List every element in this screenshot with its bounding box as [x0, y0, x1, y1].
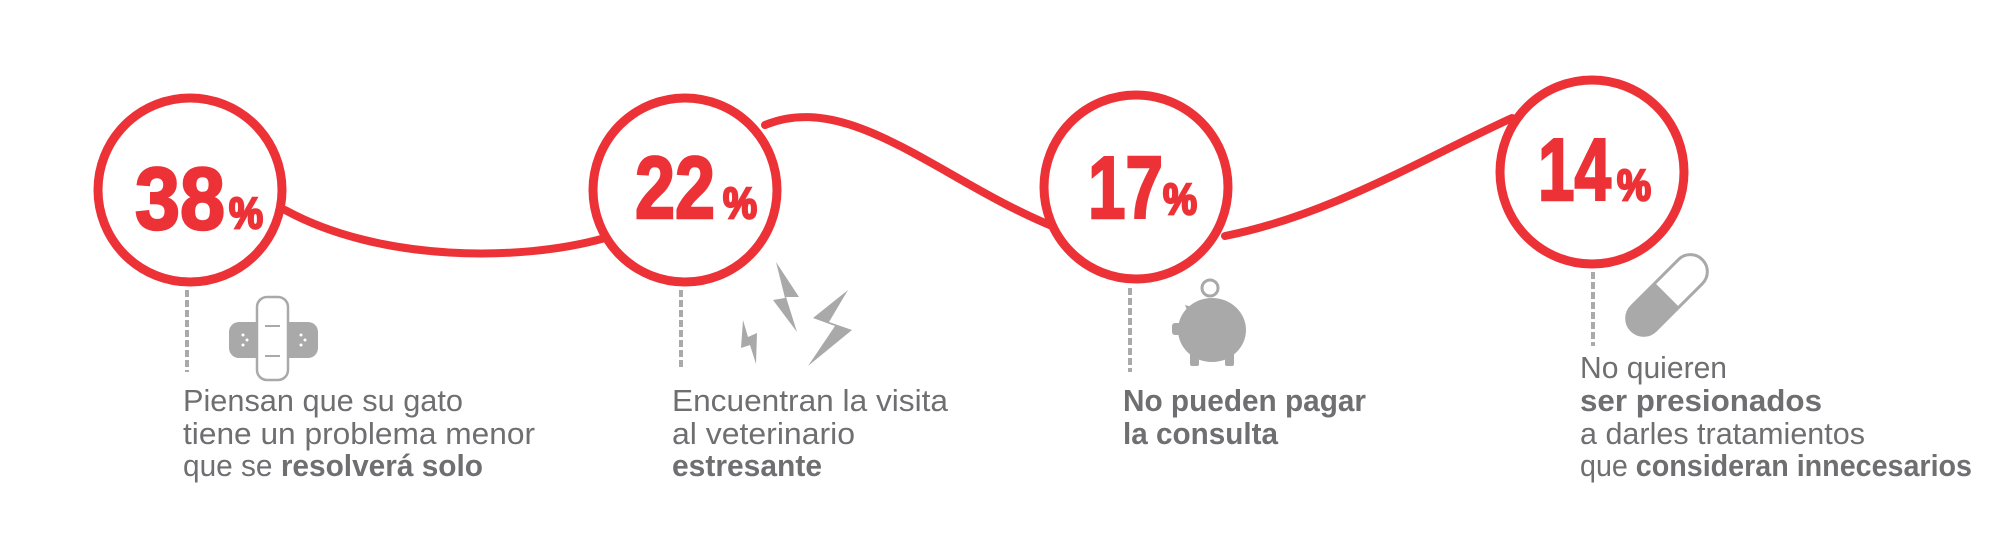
text block 1 [183, 383, 535, 483]
text block 3 [1123, 383, 1366, 451]
text block 2: estresante [672, 448, 822, 483]
text block 2 [672, 383, 949, 483]
text block 4 [1580, 350, 1972, 483]
stat 2: 22%: 22 [635, 138, 715, 237]
stat 1: 38% [98, 98, 282, 282]
text block 1: Piensan que su gato [183, 383, 463, 418]
text block 4: No quieren [1580, 350, 1727, 385]
stat 4: 14% [1500, 80, 1684, 264]
stat 3: 17%: % [1163, 175, 1197, 224]
stat 1: 38%: % [229, 189, 263, 238]
stat 3: 17%: 17 [1088, 138, 1163, 237]
stat 4: 14%: % [1617, 161, 1651, 210]
stat 2: 22% [593, 98, 777, 282]
text block 2: Encuentran la visita [672, 383, 949, 418]
text block 4: a darles tratamientos [1580, 416, 1865, 451]
stat 3: 17% [1044, 95, 1228, 279]
stat 1: 38%: 38 [135, 149, 225, 248]
text block 1: tiene un problema menor [183, 416, 535, 451]
text block 1: que se resolverá solo [183, 448, 483, 483]
stat 4: 14%: 14 [1538, 120, 1611, 219]
connecting line [285, 117, 1512, 253]
text block 2: al veterinario [672, 416, 855, 451]
icon: lightning bolts [741, 262, 852, 366]
text block 3: No pueden pagar [1123, 383, 1366, 418]
text block 4: ser presionados [1580, 383, 1822, 418]
text block 4: que consideran innecesarios [1580, 448, 1972, 483]
stat 2: 22%: % [723, 179, 757, 228]
icon: bandage [229, 297, 318, 380]
icon: pill capsule [1620, 248, 1714, 342]
dashed connectors [187, 272, 1593, 372]
text block 3: la consulta [1123, 416, 1279, 451]
icon: piggy bank [1172, 280, 1246, 366]
